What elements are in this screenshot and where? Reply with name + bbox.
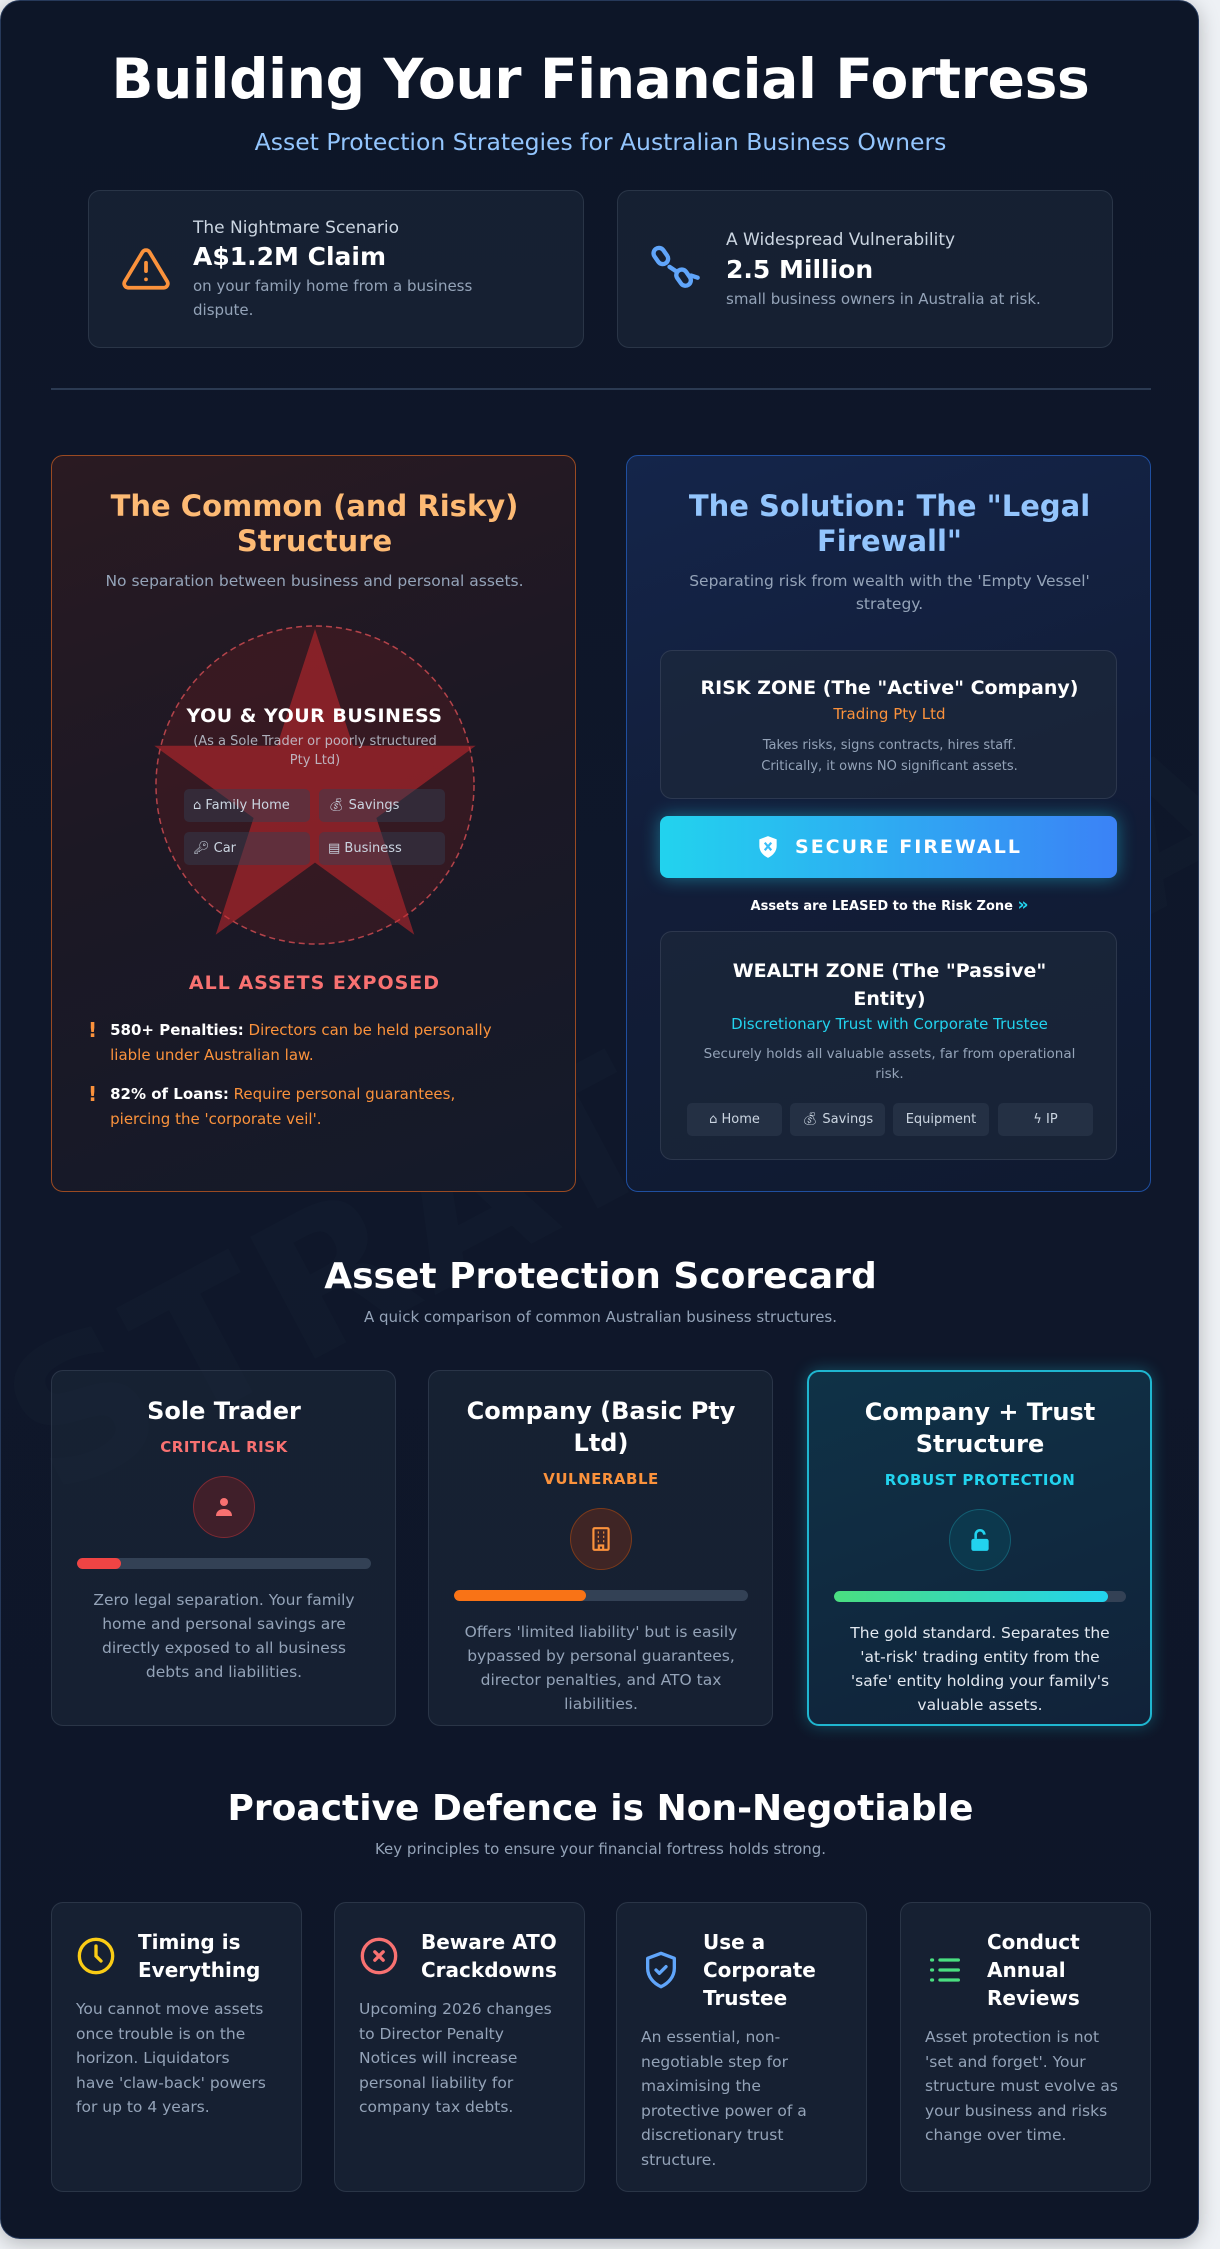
box: risk zone: Trading Pty Ltd (833, 705, 946, 723)
principle card: timing: You cannot move assets once trouble is on the horizon. Liquidators have 'claw-back' powers for up to 4 years. (76, 2000, 266, 2116)
button: secure firewall: SECURE FIREWALL (795, 836, 1022, 858)
scorecard: basic company: Offers 'limited liability' but is easily bypassed by personal guarantees, director penalties, and ATO tax liabilities. (465, 1623, 737, 1713)
principle card: corporate trustee: Use a Corporate Trustee (703, 1930, 816, 2010)
heading: scorecard: Asset Protection Scorecard (324, 1256, 877, 1297)
principle card: annual reviews: Conduct Annual Reviews (987, 1930, 1080, 2010)
stat card: vulnerability: A Widespread Vulnerability (726, 230, 955, 250)
bullet list: ! (88, 1018, 97, 1042)
heading: The Solution: The "Legal (689, 489, 1090, 523)
diagram: exposed assets: 🔑︎ Car (193, 841, 236, 856)
diagram: exposed assets: Pty Ltd) (290, 753, 340, 768)
heading (110, 489, 518, 558)
title: Building Your Financial Fortress (112, 47, 1089, 111)
diagram: exposed assets: ▤ Business (328, 841, 402, 856)
stat card: nightmare scenario: The Nightmare Scenario (193, 218, 399, 238)
scorecard: sole trader (51, 1370, 396, 1726)
panel: risky structure (51, 455, 576, 1192)
box: wealth zone: ⌂ Home (709, 1112, 760, 1127)
scorecard: sole trader: Sole Trader (147, 1397, 301, 1425)
subtitle: Asset Protection Strategies for Australian Business Owners (255, 128, 946, 156)
scorecard: company + trust: Company + Trust Structure (865, 1398, 1095, 1458)
heading: proactive defence: Proactive Defence is Non-Negotiable (228, 1788, 973, 1829)
box: wealth zone: Equipment (906, 1112, 976, 1127)
stat card: nightmare scenario: A$1.2M Claim (193, 242, 386, 271)
icon: warning (122, 248, 170, 290)
icon: broken link (651, 246, 700, 288)
diagram: exposed assets: 💰︎ Savings (328, 798, 399, 813)
scorecard: sole trader: Zero legal separation. Your family home and personal savings are directly exposed to all business debts and liabilities. (93, 1591, 355, 1681)
stat card: vulnerability: 2.5 Million (726, 255, 873, 284)
scorecard: company + trust (807, 1370, 1152, 1726)
principle card: timing (51, 1902, 302, 2192)
principle card: corporate trustee: An essential, non-negotiable step for maximising the protective power of a discretionary trust structure. (641, 2028, 807, 2168)
diagram: exposed assets: (As a Sole Trader or poorly structured (193, 734, 437, 749)
arrow note: assets leased: Assets are LEASED to the Risk Zone » (751, 895, 1028, 915)
subheading: proactive defence: Key principles to ensure your financial fortress holds strong. (375, 1840, 826, 1858)
principle card: ATO (334, 1902, 585, 2192)
icon: shield (759, 836, 777, 858)
scorecard: basic company: Company (Basic Pty Ltd) (467, 1397, 735, 1457)
diagram: exposed assets: ⌂ Family Home (193, 798, 290, 813)
diagram: exposed assets: YOU & YOUR BUSINESS (187, 705, 442, 727)
subheading: scorecard: A quick comparison of common Australian business structures. (364, 1308, 837, 1326)
bullet list: 580+ Penalties: Directors can be held personally liable under Australian law. (110, 1021, 492, 1064)
box: risk zone: Critically, it owns NO significant assets. (761, 759, 1018, 774)
box: wealth zone: ϟ IP (1033, 1112, 1058, 1127)
principle card: ATO: Upcoming 2026 changes to Director Penalty Notices will increase personal liability for company tax debts. (359, 2000, 552, 2116)
bullet list: ! (88, 1082, 97, 1106)
box: wealth zone: WEALTH ZONE (The "Passive" Entity) (733, 960, 1046, 1010)
box: risk zone (660, 650, 1117, 799)
stat card: vulnerability: small business owners in Australia at risk. (726, 290, 1041, 308)
bullet list: 82% of Loans: Require personal guarantees, piercing the 'corporate veil'. (110, 1085, 455, 1128)
heading: The Common (and Risky) (111, 489, 518, 523)
button: secure firewall (660, 816, 1117, 878)
scorecard: basic company (428, 1370, 773, 1726)
subheading: No separation between business and personal assets. (105, 572, 524, 590)
stat card: nightmare scenario (88, 190, 584, 348)
bullet list (88, 1018, 492, 1128)
heading (689, 489, 1090, 558)
principle card: annual reviews (900, 1902, 1151, 2192)
subheading: Separating risk from wealth with the 'Empty Vessel' strategy. (689, 572, 1090, 613)
principle card: ATO: Beware ATO Crackdowns (421, 1930, 557, 1982)
principle card: timing: Timing is Everything (138, 1930, 260, 1982)
box: wealth zone: Discretionary Trust with Corporate Trustee (731, 1015, 1048, 1033)
box: wealth zone (660, 931, 1117, 1160)
principle card: corporate trustee (616, 1902, 867, 2192)
scorecard: basic company: VULNERABLE (543, 1470, 659, 1488)
heading: Structure (237, 524, 392, 558)
box: risk zone: RISK ZONE (The "Active" Company) (701, 677, 1078, 699)
heading: Firewall" (817, 524, 962, 558)
scorecard: company + trust: The gold standard. Separates the 'at-risk' trading entity from the 'safe' entity holding your family's valuable assets. (850, 1624, 1110, 1714)
principle card: annual reviews: Asset protection is not 'set and forget'. Your structure must evolve as your business and risks change over time. (925, 2028, 1118, 2144)
box: wealth zone: Securely holds all valuable assets, far from operational risk. (704, 1046, 1075, 1082)
stat card: vulnerability (617, 190, 1113, 348)
scorecard: sole trader: CRITICAL RISK (160, 1438, 288, 1456)
label: all assets exposed: ALL ASSETS EXPOSED (189, 972, 440, 994)
box: wealth zone: 💰︎ Savings (802, 1112, 873, 1127)
diagram: exposed assets (154, 625, 476, 945)
stat card: nightmare scenario: on your family home from a business dispute. (193, 277, 472, 319)
box: risk zone: Takes risks, signs contracts, hires staff. (763, 738, 1016, 753)
panel: legal firewall (626, 455, 1151, 1192)
scorecard: company + trust: ROBUST PROTECTION (885, 1471, 1075, 1489)
